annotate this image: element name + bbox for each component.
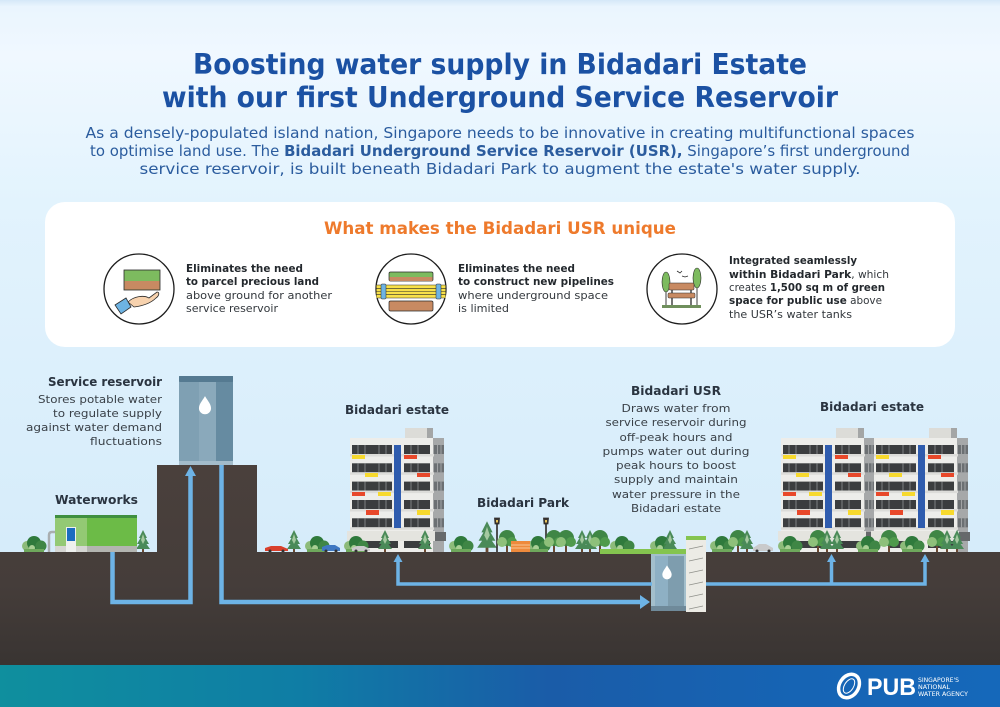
waterworks building [49, 515, 137, 552]
label: Bidadari USR: supply and maintain [614, 473, 738, 486]
ground cross-section [0, 465, 1000, 665]
PUB logo [834, 670, 968, 702]
PUB logo: NATIONAL [918, 683, 950, 691]
background sky [0, 0, 1000, 552]
feature text 2: is limited [458, 303, 509, 315]
feature text 3 [729, 255, 889, 321]
title: with our first Underground Service Reservoir [162, 81, 838, 114]
feature text 3: the USR’s water tanks [729, 309, 852, 321]
label: Bidadari USR: water pressure in the [612, 488, 740, 501]
service reservoir tank [179, 376, 233, 465]
intro paragraph: service reservoir, is built beneath Bidadari Park to augment the estate's water supply. [140, 160, 861, 178]
feature text 1: Eliminates the need [186, 263, 303, 275]
panel: what makes the USR unique [45, 202, 955, 347]
PUB logo: PUB [867, 674, 916, 701]
label: service reservoir [26, 375, 163, 448]
pipe: USR to Bidadari estate right [706, 554, 930, 584]
label: service reservoir: Service reservoir [48, 375, 162, 389]
label: Bidadari USR: pumps water out during [602, 445, 750, 458]
label: service reservoir: against water demand [26, 421, 162, 434]
title: Boosting water supply in Bidadari Estate [193, 48, 807, 81]
feature text 3: space for public use above [729, 295, 882, 307]
label: Bidadari estate right: Bidadari estate [820, 400, 924, 414]
feature text 3: within Bidadari Park, which [729, 269, 889, 281]
feature text 2: Eliminates the need [458, 263, 575, 275]
feature text 1 [186, 263, 333, 315]
icon: water drop [662, 565, 672, 579]
intro paragraph: As a densely-populated island nation, Singapore needs to be innovative in creating multifunctional spaces [86, 124, 915, 142]
label: Bidadari estate left: Bidadari estate [345, 403, 449, 417]
label: Bidadari Park: Bidadari Park [477, 496, 570, 510]
right estate building B [871, 428, 970, 552]
feature text 2: where underground space [458, 290, 608, 302]
icon: park bench [647, 254, 717, 324]
feature text 2: to construct new pipelines [458, 276, 614, 288]
icon: pipelines [376, 254, 446, 324]
pipe: USR to Bidadari estate left [394, 554, 652, 584]
label: Bidadari USR: Bidadari estate [631, 502, 721, 515]
Bidadari USR structure [600, 536, 706, 612]
pipe: waterworks to service reservoir [112, 466, 196, 602]
PUB logo: SINGAPORE'S [918, 676, 959, 684]
label: Bidadari USR: off-peak hours and [620, 431, 732, 444]
footer band [0, 665, 1000, 707]
intro paragraph [86, 124, 915, 178]
PUB logo: WATER AGENCY [918, 690, 968, 698]
intro paragraph: to optimise land use. The Bidadari Underground Service Reservoir (USR), Singapore’s first underground [90, 142, 910, 160]
label: Bidadari USR: Bidadari USR [631, 384, 721, 398]
label: Bidadari USR: Draws water from [622, 402, 730, 415]
feature text 3: Integrated seamlessly [729, 255, 857, 267]
feature text 2 [458, 263, 614, 315]
label: service reservoir: fluctuations [90, 435, 162, 448]
icon: water drop [199, 396, 211, 414]
panel heading: What makes the Bidadari USR unique [324, 219, 676, 239]
feature text 1: above ground for another [186, 290, 333, 302]
left estate building [347, 428, 446, 552]
label: Bidadari USR: service reservoir during [606, 416, 746, 429]
feature text 1: service reservoir [186, 303, 279, 315]
trees, bushes and park furniture [22, 518, 964, 552]
right estate building A [778, 428, 877, 552]
cars [265, 544, 773, 552]
label: Bidadari USR: peak hours to boost [616, 459, 737, 472]
pipe: service reservoir to USR [222, 465, 650, 609]
feature text 1: to parcel precious land [186, 276, 319, 288]
icon: land on hand [104, 254, 174, 324]
title [162, 48, 838, 114]
label: Bidadari USR [602, 384, 750, 515]
label: service reservoir: Stores potable water [38, 393, 163, 406]
label: waterworks: Waterworks [55, 493, 138, 507]
feature text 3: creates 1,500 sq m of green [729, 282, 885, 294]
label: service reservoir: to regulate supply [53, 407, 163, 420]
